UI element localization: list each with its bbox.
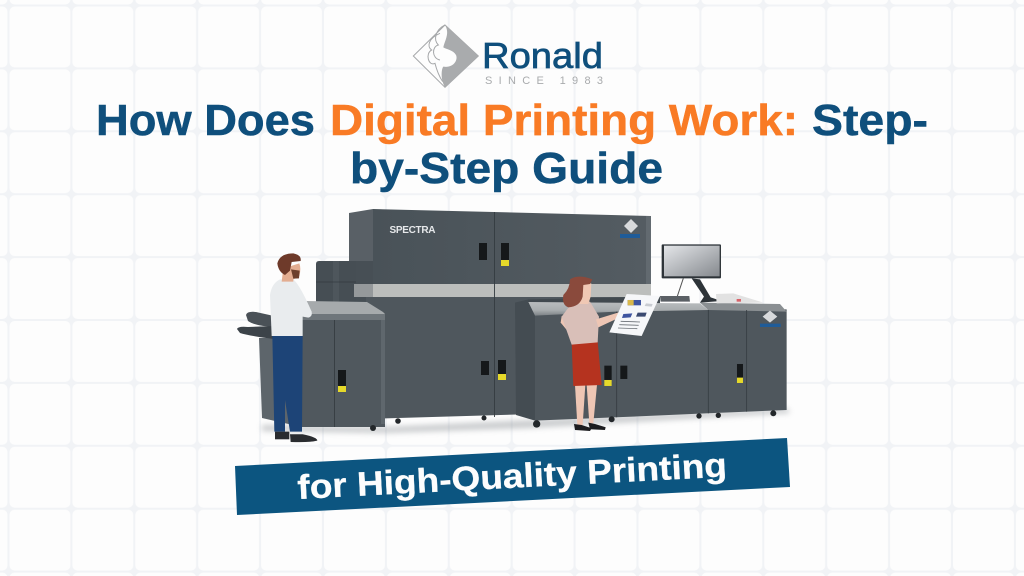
panel divider	[494, 212, 496, 417]
unit casters	[533, 410, 776, 428]
logo tagline: SINCE 1983	[485, 75, 603, 87]
woman face	[579, 283, 591, 304]
woman front arm	[596, 312, 623, 327]
cabinet caster	[370, 425, 376, 431]
title	[96, 96, 928, 193]
man hair	[277, 253, 301, 275]
logo wordmark: Ronald	[482, 35, 603, 76]
keyboard	[660, 296, 690, 302]
logo	[413, 25, 603, 87]
print sample sheet	[609, 294, 660, 336]
silver band	[373, 284, 651, 297]
title line 2: by-Step Guide	[350, 144, 663, 193]
man trousers	[272, 335, 303, 432]
right edge strip	[646, 216, 651, 284]
man beard	[291, 269, 300, 279]
spectra label: SPECTRA	[390, 225, 436, 236]
paper stack unit	[316, 261, 356, 303]
printer illustration	[237, 209, 787, 431]
unit side face	[515, 299, 535, 421]
cabinet side strip	[381, 320, 385, 424]
right printing unit	[515, 244, 787, 428]
woman legs	[575, 385, 597, 425]
man head	[282, 263, 300, 282]
woman back arm	[561, 316, 582, 344]
man shirt	[270, 279, 312, 336]
unit logo badge	[760, 311, 781, 327]
banner ribbon	[235, 438, 790, 515]
subtitle banner	[235, 438, 790, 515]
silver band left	[354, 284, 373, 297]
person: man	[270, 253, 317, 442]
woman hair	[563, 277, 592, 307]
cabinet body	[302, 320, 385, 427]
upper handles	[479, 243, 509, 266]
woman skirt	[572, 342, 602, 386]
press rear column	[350, 261, 373, 311]
title highlighted words: Digital Printing Work:	[330, 96, 798, 145]
title line 1 navy start: How Does	[96, 96, 315, 145]
unit dividers	[617, 310, 747, 417]
person: woman with print sample	[561, 277, 660, 431]
man shoes	[275, 432, 317, 442]
press left face	[349, 209, 373, 300]
finisher unit	[237, 312, 302, 427]
finisher tower	[259, 338, 302, 427]
unit dark back strip	[528, 297, 660, 304]
press casters	[395, 416, 486, 424]
unit right lid	[700, 303, 787, 312]
unit front	[535, 309, 787, 421]
unit lid	[528, 302, 708, 316]
lower handles	[481, 360, 506, 380]
finisher lower tray	[237, 326, 274, 339]
press logo badge	[620, 219, 640, 238]
cabinet divider	[334, 320, 336, 427]
unit handles	[604, 364, 743, 386]
cabinet top rim	[302, 314, 385, 320]
central press unit	[316, 209, 651, 424]
press upper front	[373, 209, 651, 300]
woman blouse	[562, 302, 599, 345]
finisher upper tray	[246, 312, 274, 327]
floor shadow	[262, 408, 790, 433]
cabinet lid	[302, 301, 385, 315]
banner text: for High-Quality Printing	[296, 447, 728, 507]
cabinet handle	[338, 370, 346, 392]
title line 1 navy end: Step-	[812, 96, 928, 145]
logo mark	[413, 25, 478, 87]
small desktop device	[716, 293, 763, 303]
left feeder cabinet	[302, 301, 385, 431]
press lower front	[366, 297, 535, 419]
monitor	[662, 244, 722, 303]
woman shoes	[574, 423, 606, 431]
